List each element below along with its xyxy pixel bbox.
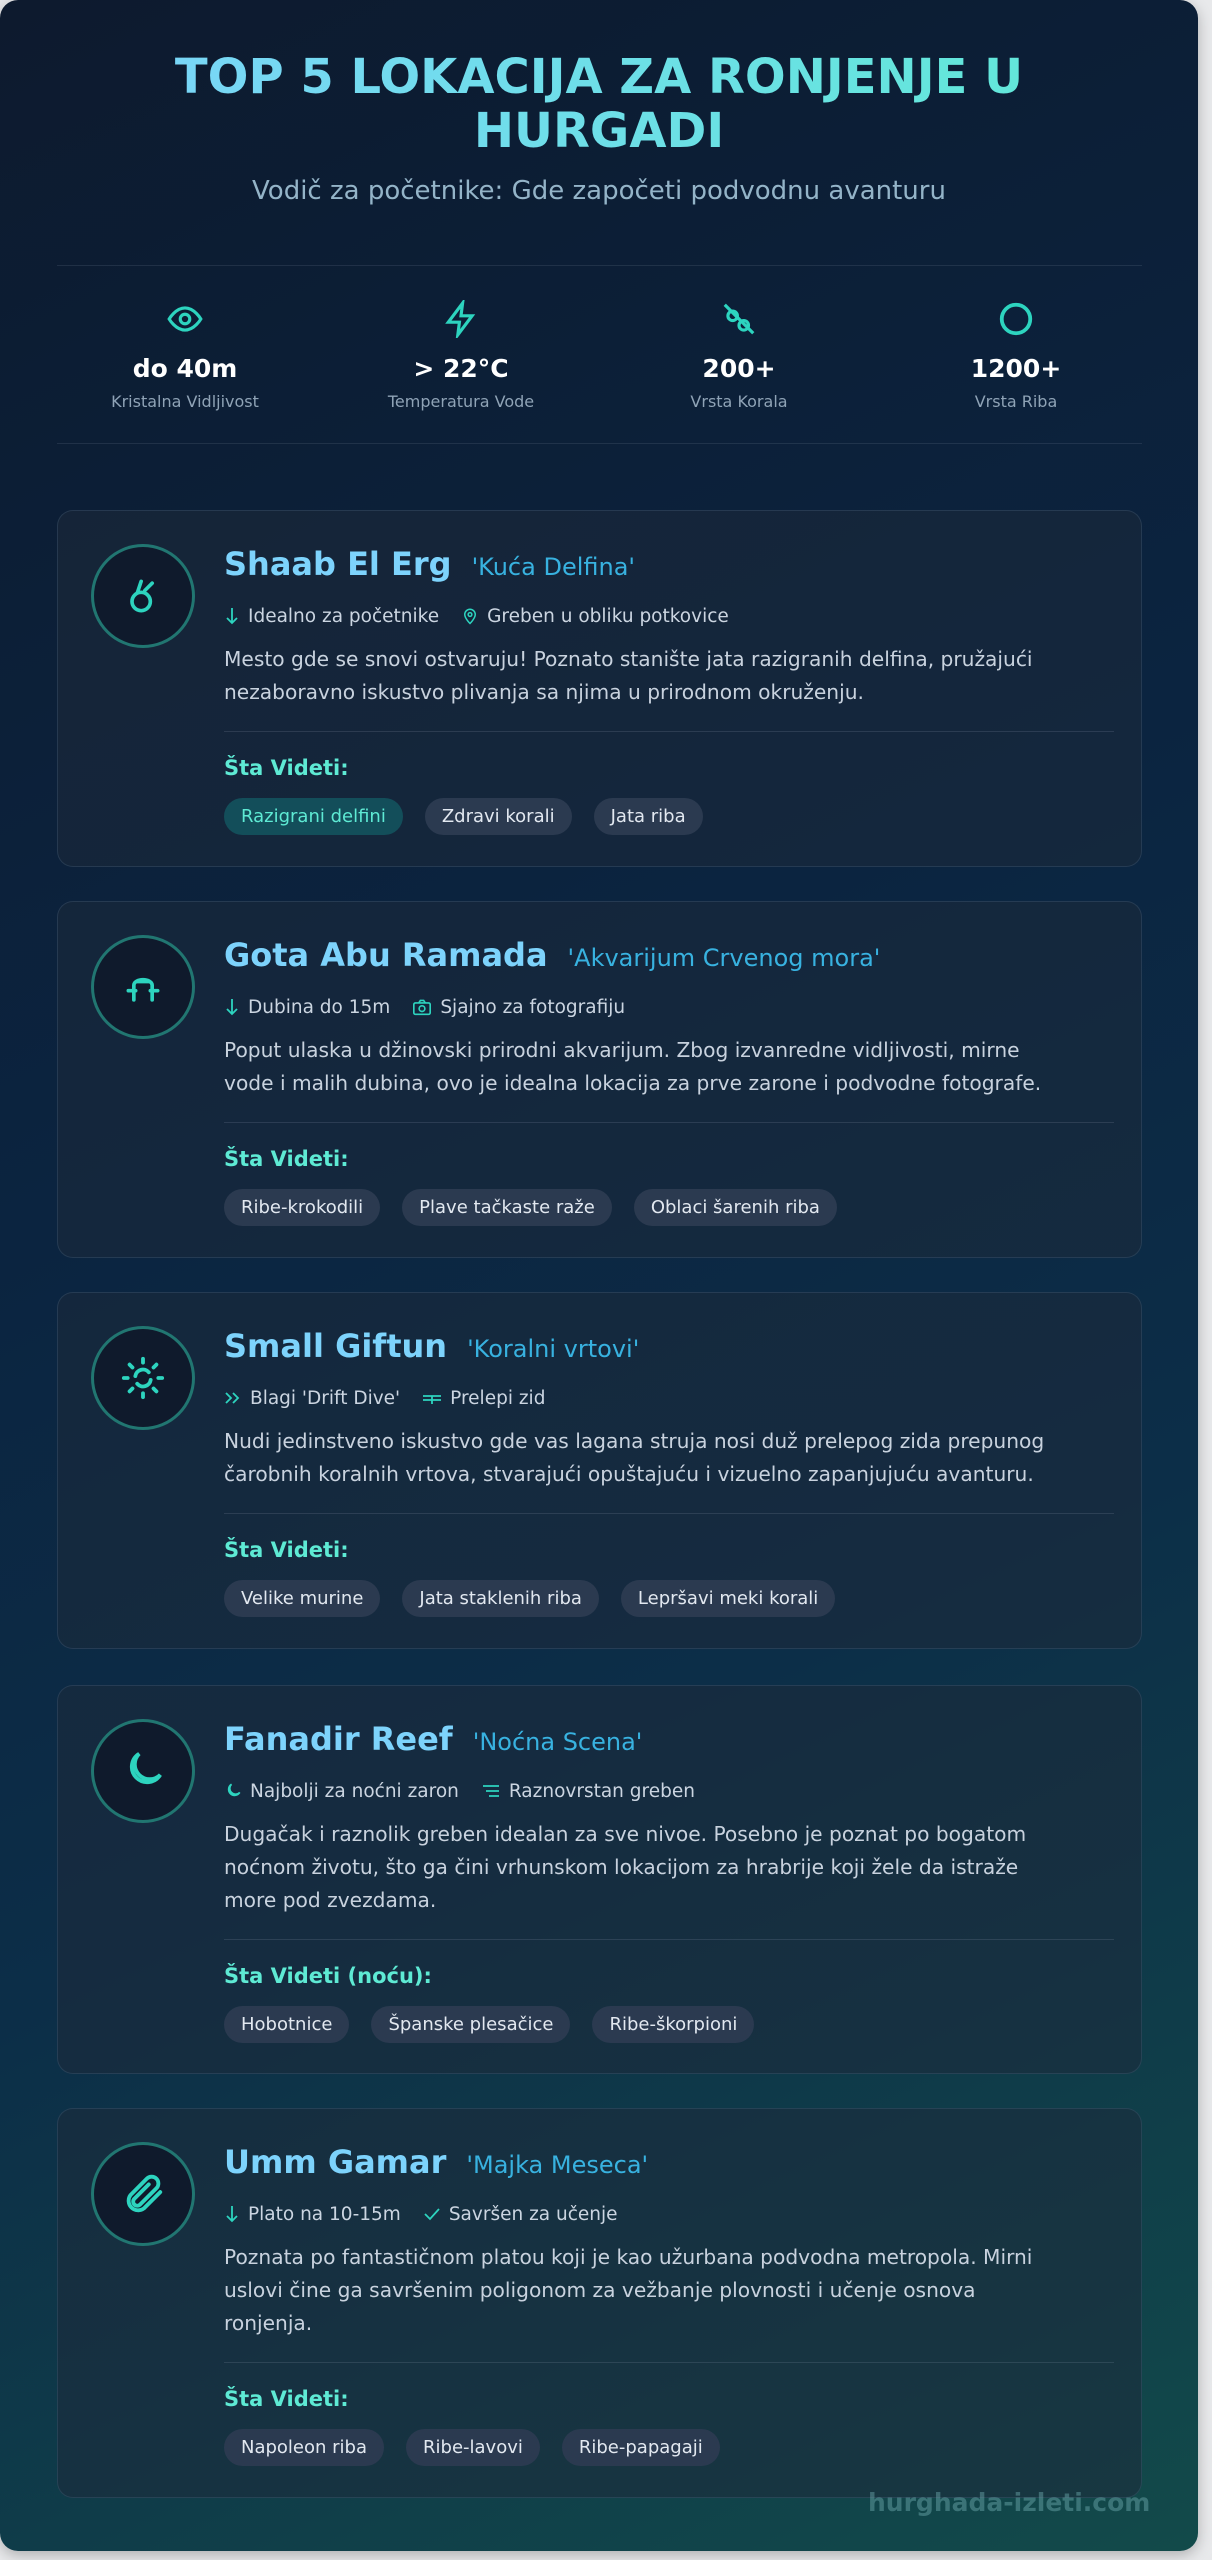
icon: moon bbox=[91, 1719, 195, 1823]
meta: Prelepi zid bbox=[450, 1388, 545, 1408]
description: Dugačak i raznolik greben idealan za sve nivoe. Posebno je poznat po bogatom bbox=[224, 1822, 1026, 1846]
tags: Plave tačkaste raže bbox=[419, 1197, 595, 1218]
stat: fish bbox=[971, 302, 1061, 411]
description: Mesto gde se snovi ostvaruju! Poznato stanište jata razigranih delfina, pružajući bbox=[224, 647, 1033, 671]
description: Poput ulaska u džinovski prirodni akvarijum. Zbog izvanredne vidljivosti, mirne bbox=[224, 1038, 1020, 1062]
icon: eye bbox=[167, 306, 203, 332]
tags bbox=[224, 2006, 754, 2043]
description bbox=[224, 647, 1033, 704]
heading: Umm Gamar 'Majka Meseca' bbox=[224, 2143, 648, 2181]
description: čarobnih koralnih vrtova, stvarajući opuštajuću i vizuelno zapanjujuću avanturu. bbox=[224, 1462, 1034, 1486]
card: Fanadir Reef bbox=[57, 1685, 1142, 2074]
what to see: Šta Videti: bbox=[224, 1147, 349, 1171]
description: more pod zvezdama. bbox=[224, 1888, 436, 1912]
heading: Gota Abu Ramada 'Akvarijum Crvenog mora' bbox=[224, 936, 880, 974]
card: Small Giftun bbox=[57, 1292, 1142, 1649]
tags bbox=[224, 1580, 835, 1617]
title: TOP 5 LOKACIJA ZA RONJENJE U bbox=[175, 49, 1023, 105]
tags: Ribe-lavovi bbox=[423, 2437, 523, 2458]
description bbox=[224, 1822, 1026, 1912]
icon: bolt bbox=[445, 300, 476, 338]
meta bbox=[226, 2204, 618, 2224]
footer watermark: hurghada-izleti.com bbox=[868, 2488, 1150, 2517]
icon: coral bbox=[724, 304, 754, 334]
icon: coral sun bbox=[91, 1326, 195, 1430]
tags: Oblaci šarenih riba bbox=[651, 1197, 820, 1218]
meta bbox=[226, 606, 729, 626]
stat: visibility: do 40m bbox=[133, 354, 237, 383]
description: Nudi jedinstveno iskustvo gde vas lagana struja nosi duž prelepog zida prepunog bbox=[224, 1429, 1044, 1453]
what to see: Šta Videti: bbox=[224, 756, 349, 780]
stat: visibility: Kristalna Vidljivost bbox=[111, 392, 259, 411]
description: noćnom životu, što ga čini vrhunskom lokacijom za hrabrije koji žele da istraže bbox=[224, 1855, 1018, 1879]
icon: dolphin bbox=[91, 544, 195, 648]
heading: Small Giftun 'Koralni vrtovi' bbox=[224, 1327, 639, 1365]
card: Gota Abu Ramada bbox=[57, 901, 1142, 1258]
what to see: Šta Videti (noću): bbox=[224, 1964, 432, 1988]
meta bbox=[225, 1388, 545, 1408]
stat: corals: Vrsta Korala bbox=[690, 392, 788, 411]
stat: visibility bbox=[111, 306, 259, 411]
tags: Napoleon riba bbox=[241, 2437, 367, 2458]
description bbox=[224, 1038, 1041, 1095]
tags bbox=[224, 1189, 837, 1226]
tags: Jata riba bbox=[611, 806, 686, 827]
stat: corals bbox=[690, 304, 788, 411]
card: Umm Gamar bbox=[57, 2108, 1142, 2498]
stat: temperature bbox=[388, 300, 534, 411]
description: vode i malih dubina, ovo je idealna lokacija za prve zarone i podvodne fotografe. bbox=[224, 1071, 1041, 1095]
icon: paperclip bbox=[91, 2142, 195, 2246]
meta: Najbolji za noćni zaron bbox=[250, 1780, 459, 1802]
tags: Ribe-krokodili bbox=[241, 1197, 363, 1218]
stat: corals: 200+ bbox=[702, 354, 776, 383]
stat: temperature: > 22°C bbox=[413, 354, 509, 383]
meta: Blagi 'Drift Dive' bbox=[250, 1388, 400, 1408]
title bbox=[0, 50, 1198, 158]
meta bbox=[226, 996, 625, 1018]
subtitle: Vodič za početnike: Gde započeti podvodnu avanturu bbox=[252, 176, 946, 206]
meta: Sjajno za fotografiju bbox=[440, 996, 625, 1018]
tags: Razigrani delfini bbox=[241, 806, 386, 827]
stat: temperature: Temperatura Vode bbox=[388, 392, 534, 411]
meta: Raznovrstan greben bbox=[509, 1780, 695, 1802]
tags: Španske plesačice bbox=[388, 2014, 553, 2035]
icon: ring bbox=[1000, 302, 1032, 336]
description: nezaboravno iskustvo plivanja sa njima u prirodnom okruženju. bbox=[224, 680, 864, 704]
tags: Ribe-papagaji bbox=[579, 2437, 703, 2458]
meta bbox=[228, 1780, 695, 1802]
tags: Lepršavi meki korali bbox=[638, 1588, 818, 1609]
tags: Hobotnice bbox=[241, 2014, 332, 2035]
heading: Fanadir Reef 'Noćna Scena' bbox=[224, 1720, 642, 1758]
tags: Jata staklenih riba bbox=[419, 1588, 582, 1609]
description: uslovi čine ga savršenim poligonom za vežbanje plovnosti i učenje osnova bbox=[224, 2278, 976, 2302]
what to see: Šta Videti: bbox=[224, 2387, 349, 2411]
tags: Ribe-škorpioni bbox=[609, 2014, 737, 2035]
stat: fish: Vrsta Riba bbox=[975, 392, 1057, 411]
meta: Dubina do 15m bbox=[248, 996, 390, 1018]
meta: Plato na 10-15m bbox=[248, 2204, 401, 2224]
card: Shaab El Erg bbox=[57, 510, 1142, 867]
tags: Zdravi korali bbox=[442, 806, 555, 827]
meta: Greben u obliku potkovice bbox=[487, 606, 729, 626]
icon: aquarium bbox=[91, 935, 195, 1039]
stat: fish: 1200+ bbox=[971, 354, 1061, 383]
tags bbox=[224, 2429, 720, 2466]
what to see: Šta Videti: bbox=[224, 1538, 349, 1562]
heading: Shaab El Erg 'Kuća Delfina' bbox=[224, 545, 635, 583]
description: ronjenja. bbox=[224, 2311, 312, 2335]
meta: Idealno za početnike bbox=[248, 606, 439, 626]
description bbox=[224, 2245, 1032, 2335]
tags: Velike murine bbox=[241, 1588, 363, 1609]
description: Poznata po fantastičnom platou koji je kao užurbana podvodna metropola. Mirni bbox=[224, 2245, 1032, 2269]
tags bbox=[224, 798, 703, 835]
description bbox=[224, 1429, 1044, 1486]
meta: Savršen za učenje bbox=[449, 2204, 618, 2224]
title: HURGADI bbox=[474, 103, 724, 159]
